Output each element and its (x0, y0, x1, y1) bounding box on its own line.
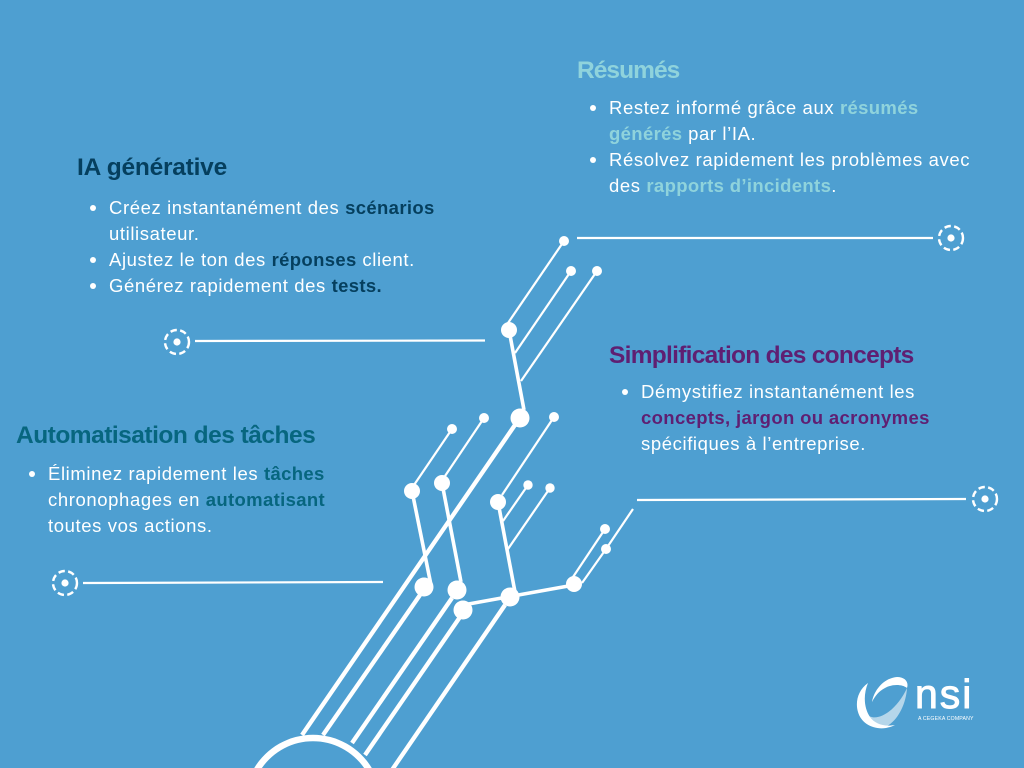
bullet list: IA générative: Ajustez le ton des réponses client. (109, 249, 415, 270)
bullet list: Résumés (590, 97, 970, 196)
bullet list: Résumés: Restez informé grâce aux résumés (609, 97, 918, 118)
bullet list: Automatisation des tâches: Éliminez rapidement les tâches (48, 463, 325, 484)
bullet list: Automatisation des tâches (29, 463, 325, 536)
thin branches (414, 241, 633, 583)
bullet list: IA générative: Générez rapidement des tests. (109, 275, 382, 296)
hub arc (254, 735, 372, 768)
thick branches (412, 330, 574, 605)
heading: Résumés: Résumés (577, 57, 679, 84)
bullet list: Simplification des concepts: Démystifiez instantanément les (641, 381, 915, 402)
bullet list: Automatisation des tâches: chronophages en automatisant (48, 489, 325, 510)
bullet list: Automatisation des tâches: toutes vos actions. (48, 515, 213, 536)
logo wordmark: nsi (915, 671, 973, 717)
bullet list: Résumés: Résolvez rapidement les problèmes avec (609, 149, 970, 170)
logo tagline: A CEGEKA COMPANY (918, 716, 974, 722)
bullet list: IA générative: utilisateur. (109, 223, 200, 244)
bullet list: Simplification des concepts (622, 381, 930, 454)
logo: nsi (856, 671, 974, 728)
targets (53, 226, 997, 595)
bullet list: IA générative: Créez instantanément des scénarios (109, 197, 435, 218)
nodes (404, 236, 611, 620)
bullet list: Simplification des concepts: spécifiques à l’entreprise. (641, 433, 866, 454)
panel: Résumés (577, 57, 970, 196)
panel: IA générative (77, 154, 435, 296)
bullet list: Résumés: générés par l’IA. (609, 123, 756, 144)
bullet list: IA générative (90, 197, 435, 296)
heading: Automatisation des tâches: Automatisation des tâches (16, 422, 315, 449)
bullet list: Simplification des concepts: concepts, jargon ou acronymes (641, 407, 930, 428)
heading: IA générative: IA générative (77, 154, 227, 181)
bullet list: Résumés: des rapports d’incidents. (609, 175, 837, 196)
panel: Simplification des concepts (609, 342, 930, 454)
panel: Automatisation des tâches (16, 422, 325, 536)
target centres (61, 234, 989, 587)
connector lines (83, 238, 966, 583)
icon: logo swoosh (856, 677, 908, 728)
trunk lines (302, 422, 517, 768)
heading: Simplification des concepts: Simplification des concepts (609, 342, 914, 369)
